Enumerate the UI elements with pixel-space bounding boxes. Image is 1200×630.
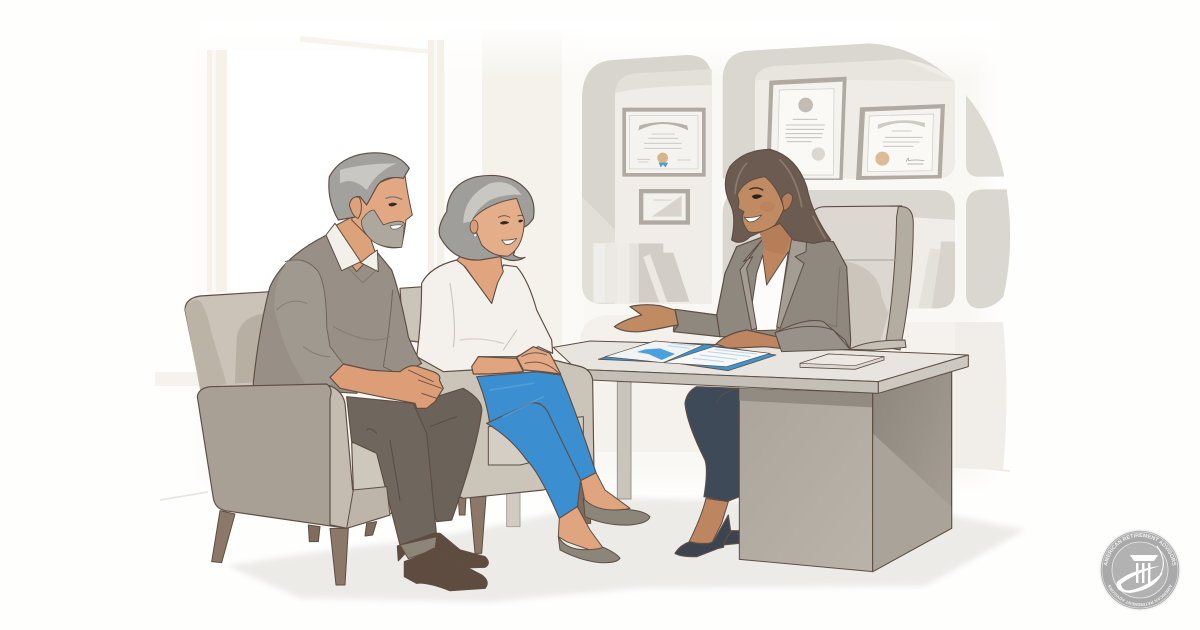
shelf: upper right bbox=[723, 43, 955, 178]
far shoe bbox=[583, 498, 650, 525]
wall rail and floor line left bbox=[155, 315, 1010, 500]
logo badge bbox=[1100, 530, 1180, 610]
woman's flat shoes bbox=[558, 498, 650, 563]
hair front bbox=[463, 182, 522, 223]
blouse bbox=[417, 260, 553, 372]
shelf: lower right bbox=[723, 190, 955, 308]
advisor forearm and hand on desk bbox=[716, 326, 850, 352]
woman bbox=[417, 175, 630, 550]
shelf: far right top bbox=[966, 95, 1004, 177]
back rest bbox=[185, 292, 270, 392]
desk leg behind people bbox=[617, 382, 631, 499]
man's seat arm bbox=[197, 384, 390, 528]
face bbox=[472, 198, 524, 256]
desk pedestal bbox=[739, 372, 952, 572]
open book bbox=[598, 341, 776, 371]
advisor torso and jacket bbox=[673, 237, 851, 352]
advisor and desk bbox=[553, 149, 968, 572]
advisor arm and open hand bbox=[614, 305, 720, 337]
office chair bbox=[813, 206, 913, 350]
books: right shelf bbox=[918, 242, 955, 308]
trousers far leg bbox=[415, 388, 482, 522]
woman's clasped hands bbox=[517, 347, 561, 374]
far shoe bbox=[397, 533, 488, 568]
bookshelves with framed certificates bbox=[582, 43, 1010, 308]
near lower leg bbox=[558, 507, 603, 550]
man's forearm and clasped hands bbox=[330, 364, 443, 408]
far lower leg bbox=[581, 473, 630, 514]
seat shadow bbox=[352, 427, 430, 443]
man bbox=[253, 153, 488, 591]
head bbox=[352, 175, 412, 248]
window bbox=[207, 36, 444, 292]
man's armchair back bbox=[185, 153, 561, 591]
certificate: left bbox=[622, 108, 706, 177]
logo column icon bbox=[1117, 546, 1163, 593]
near shoe bbox=[558, 537, 620, 563]
trousers near leg bbox=[347, 397, 437, 545]
certificate: tall bbox=[766, 77, 847, 180]
forearm bbox=[472, 357, 523, 374]
sock bbox=[400, 537, 437, 559]
near shoe bbox=[404, 548, 487, 591]
near sleeve shading bbox=[274, 260, 343, 386]
chair legs bbox=[458, 480, 591, 553]
hair back bbox=[439, 175, 534, 261]
woman's armchair bbox=[400, 175, 630, 553]
neck and chest bbox=[457, 247, 503, 303]
logo lettering: AMERICAN RETIREMENT ADVISORS bbox=[1104, 533, 1176, 566]
certificate: small bbox=[639, 189, 690, 225]
sweater torso bbox=[253, 235, 422, 393]
hair bbox=[329, 153, 409, 220]
advisor neck and head bbox=[725, 149, 831, 255]
desk top bbox=[553, 341, 968, 393]
advisor legs and heels bbox=[675, 498, 739, 557]
beard bbox=[361, 210, 404, 247]
chair cushion bbox=[488, 417, 583, 465]
books: left shelf bbox=[593, 243, 689, 303]
ear bbox=[349, 197, 361, 218]
jeans bbox=[477, 372, 596, 518]
eye bbox=[388, 203, 397, 206]
certificate: right bbox=[856, 104, 945, 180]
notebook on desk bbox=[800, 354, 884, 369]
seat front bbox=[352, 433, 437, 517]
man's chair legs bbox=[212, 511, 377, 585]
shelf: far right bottom bbox=[966, 189, 1010, 308]
collar and neck bbox=[330, 212, 375, 272]
shelf: upper left bbox=[582, 55, 712, 304]
floor shadow bbox=[228, 498, 1025, 602]
advisor trousers bbox=[685, 387, 739, 502]
chair back and arm bbox=[400, 287, 594, 498]
logo lettering bottom: AMERICAN RETIREMENT ADVISORS bbox=[1108, 584, 1172, 606]
